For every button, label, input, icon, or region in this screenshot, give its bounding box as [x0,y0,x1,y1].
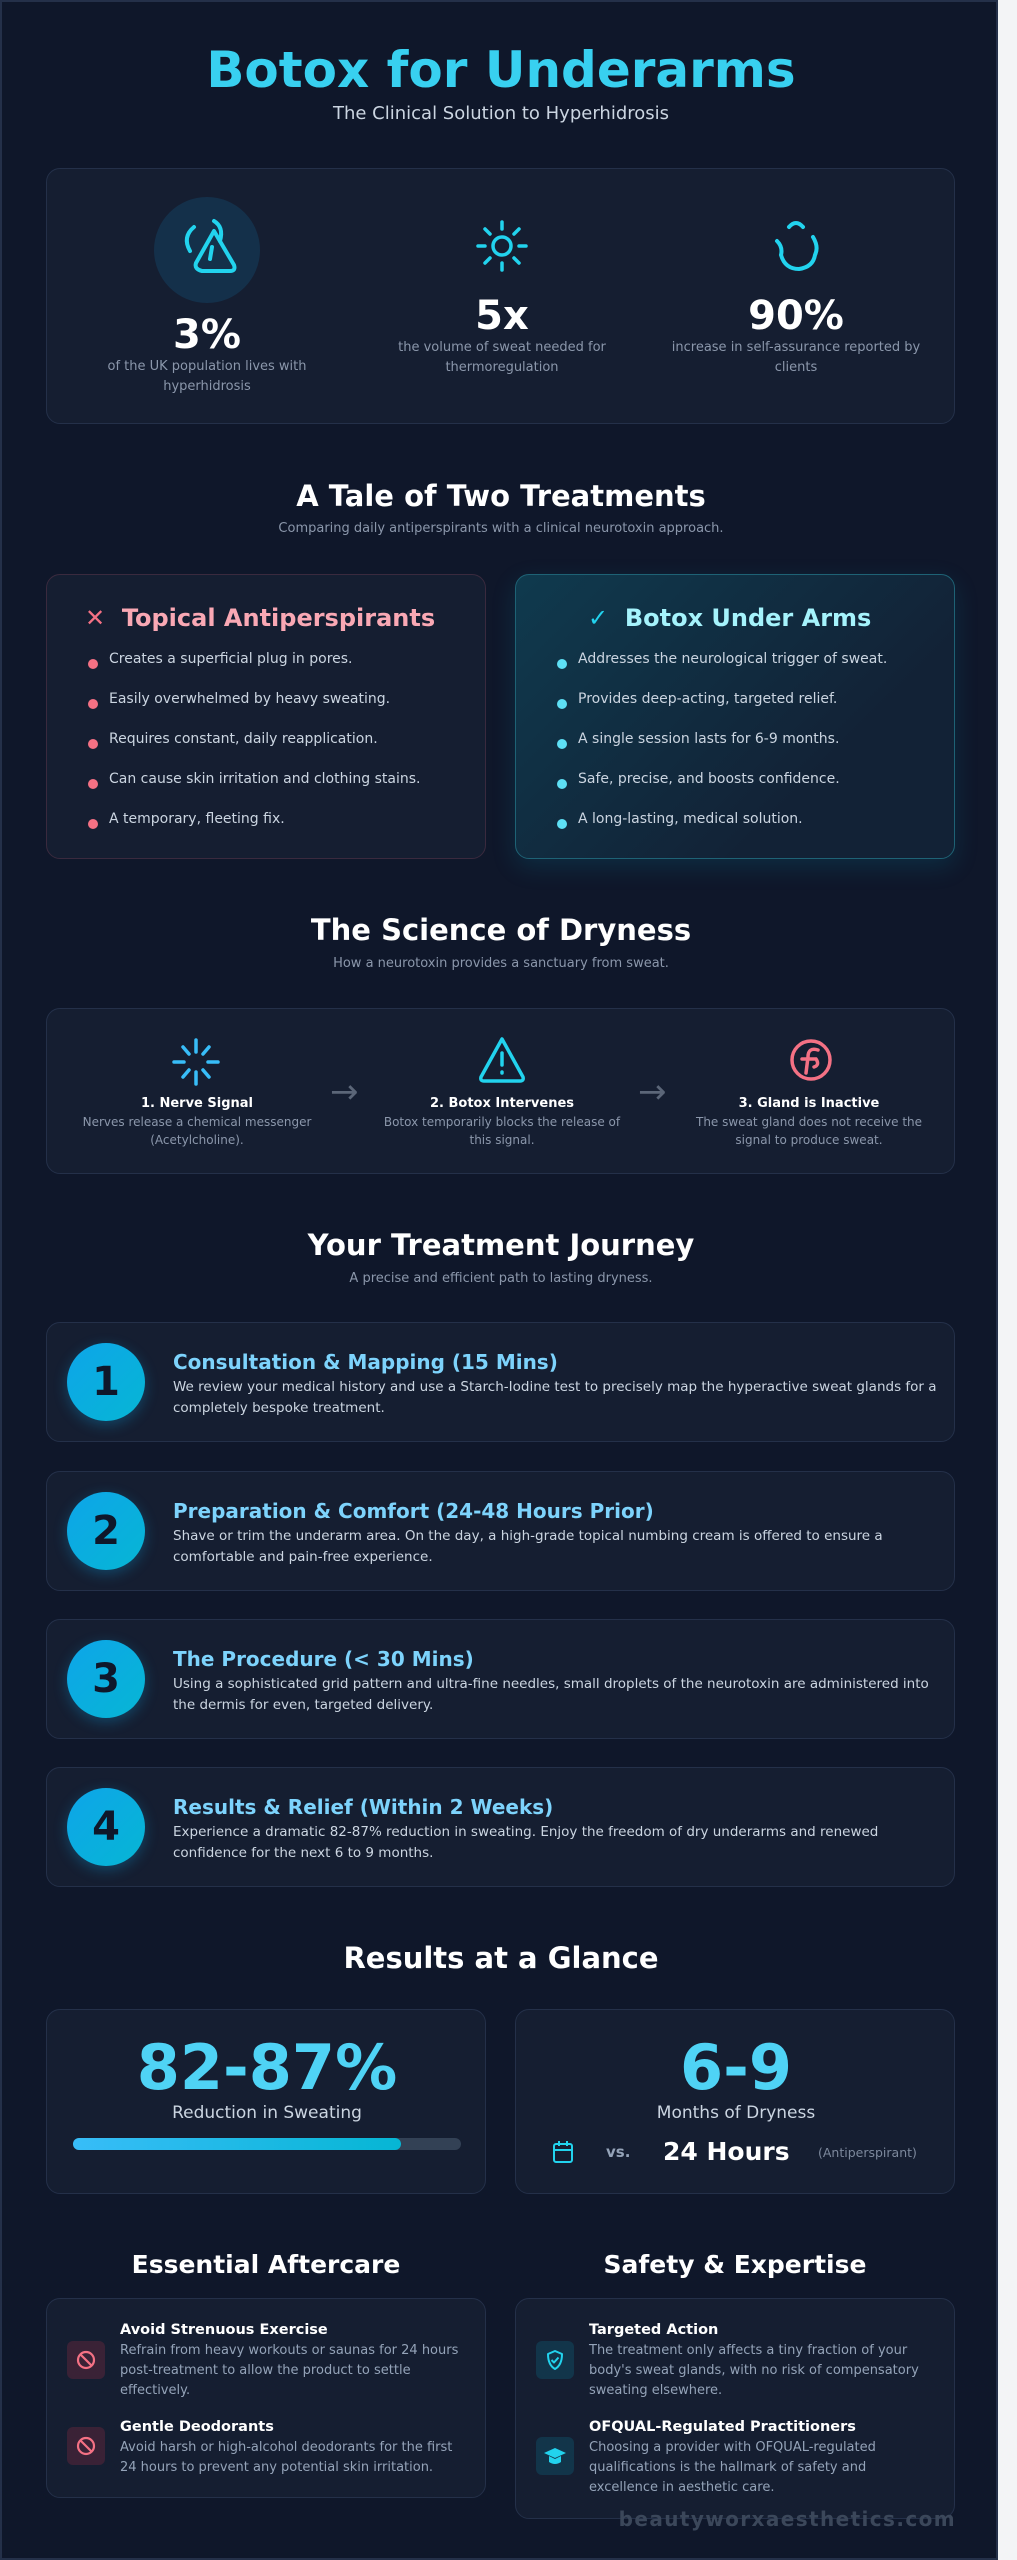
text: How a neurotoxin provides a sanctuary from sweat. [333,956,669,971]
heading: science of dryness: The Science of Dryness [311,913,691,947]
panel: months of dryness: 6-9 [680,2031,792,2104]
stat: 5x: 5x [475,293,529,339]
step 1 [46,1322,955,1442]
bullet list: A long-lasting, medical solution. [578,811,803,827]
bullet list: Creates a superficial plug in pores. [109,651,352,667]
panel: safety [515,2298,955,2519]
heading: essential aftercare: Essential Aftercare [132,2250,400,2279]
title: Botox for Underarms [206,41,796,99]
panel: months of dryness: vs. [606,2143,630,2161]
bullet list: Provides deep-acting, targeted relief. [578,691,837,707]
item: ofqual: OFQUAL-Regulated Practitioners [589,2419,856,2435]
bullet list: Easily overwhelmed by heavy sweating. [109,691,390,707]
step 3: Using a sophisticated grid pattern and ultra-fine needles, small droplets of the neurotoxin are administered into the dermis for even, targeted delivery. [173,1676,929,1713]
bullet list: Addresses the neurological trigger of sweat. [578,651,887,667]
step 2: Preparation & Comfort (24-48 Hours Prior) [173,1499,654,1523]
bullet list: A temporary, fleeting fix. [109,811,285,827]
heading: tale of two treatments: A Tale of Two Treatments [296,479,706,513]
arrow 2: → [638,1072,666,1112]
step 3: The Procedure (< 30 Mins) [173,1647,474,1671]
panel: reduction in sweating: Reduction in Sweating [172,2103,362,2123]
item: avoid exercise: Avoid Strenuous Exercise [120,2322,328,2338]
stat: 3%: 3% [173,312,241,358]
step 2: Shave or trim the underarm area. On the day, a high-grade topical numbing cream is offered to ensure a comfortable and pain-free experience. [173,1528,883,1565]
panel: months of dryness: (Antiperspirant) [818,2145,917,2160]
panel: science steps [46,1008,955,1174]
panel: reduction in sweating [46,2009,486,2194]
panel: aftercare [46,2298,486,2498]
icon: sun [476,220,528,272]
step 2 [46,1471,955,1591]
bullet list: Safe, precise, and boosts confidence. [578,771,840,787]
panel: key stats [46,168,955,424]
panel: reduction in sweating: 82-87% [137,2031,397,2104]
panel: months of dryness: Months of Dryness [657,2103,815,2123]
step 1: 1 [92,1359,120,1405]
panel: science steps: The sweat gland does not receive the signal to produce sweat. [696,1115,922,1147]
text: A precise and efficient path to lasting dryness. [349,1271,653,1286]
step 3 [46,1619,955,1739]
bullet list [557,651,887,829]
step 1: Consultation & Mapping (15 Mins) [173,1350,558,1374]
icon: smile [774,221,819,271]
step 1 text: 1. Nerve Signal [141,1096,253,1111]
panel: science steps: Botox temporarily blocks the release of this signal. [384,1115,620,1147]
heading: ✕ Topical Antiperspirants [85,604,435,632]
icon: graduation cap [536,2437,574,2475]
panel: key stats: of the UK population lives with hyperhidrosis [107,359,306,394]
heading: ✓ Botox Under Arms [588,604,871,632]
heading: results at a glance: Results at a Glance [343,1941,659,1975]
panel: months of dryness [515,2009,955,2194]
icon: no exercise [67,2341,105,2379]
watermark: beautyworxaesthetics.com [619,2507,956,2531]
heading: treatment journey: Your Treatment Journey [308,1228,694,1262]
icon: nerve signal [172,1038,220,1086]
step 4: Results & Relief (Within 2 Weeks) [173,1795,553,1819]
icon: shield [536,2341,574,2379]
step 4: Experience a dramatic 82-87% reduction in sweating. Enjoy the freedom of dry underarms and renewed confidence for the next 6 to 9 months. [173,1824,878,1861]
step 1: We review your medical history and use a Starch-Iodine test to precisely map the hyperactive sweat glands for a completely bespoke treatment. [173,1379,937,1416]
icon: inactive gland [790,1039,832,1081]
step 2 text: 2. Botox Intervenes [430,1096,574,1111]
step 4 [46,1767,955,1887]
arrow 1: → [330,1072,358,1112]
item: targeted action: The treatment only affects a tiny fraction of your body's sweat glands, with no risk of compensatory sweating elsewhere. [589,2343,919,2398]
icon: warning [479,1037,525,1083]
step 4: 4 [92,1804,120,1850]
panel: botox under arms [515,574,955,859]
step 3 text: 3. Gland is Inactive [739,1096,879,1111]
subtitle: The Clinical Solution to Hyperhidrosis [333,103,669,124]
step 3: 3 [92,1656,120,1702]
bullet list: Can cause skin irritation and clothing stains. [109,771,420,787]
panel: months of dryness: 24 Hours [663,2137,790,2166]
item: avoid exercise: Refrain from heavy workouts or saunas for 24 hours post-treatment to allow the product to settle effectively. [120,2343,458,2398]
item: gentle deodorants [120,2419,452,2475]
item: targeted action: Targeted Action [589,2322,718,2338]
progress bar [73,2138,461,2150]
panel: key stats: increase in self-assurance reported by clients [672,340,920,375]
item: gentle deodorants: Gentle Deodorants [120,2419,274,2435]
bullet list: A single session lasts for 6-9 months. [578,731,839,747]
text: Comparing daily antiperspirants with a clinical neurotoxin approach. [278,521,724,536]
item: gentle deodorants: Avoid harsh or high-alcohol deodorants for the first 24 hours to prevent any potential skin irritation. [120,2440,452,2475]
item: ofqual: Choosing a provider with OFQUAL-regulated qualifications is the hallmark of safety and excellence in aesthetic care. [589,2440,876,2495]
icon: no deodorant [67,2427,105,2465]
bullet list [88,651,420,829]
stat: 90%: 90% [748,293,844,339]
step 2: 2 [92,1508,120,1554]
icon: hand/warning circle [154,197,260,303]
heading: safety & expertise: Safety & Expertise [604,2250,866,2279]
icon: calendar [553,2141,573,2163]
panel: topical antiperspirants [46,574,486,859]
panel: science steps: Nerves release a chemical messenger (Acetylcholine). [83,1115,311,1147]
bullet list: Requires constant, daily reapplication. [109,731,378,747]
panel: key stats: the volume of sweat needed for thermoregulation [398,340,606,375]
